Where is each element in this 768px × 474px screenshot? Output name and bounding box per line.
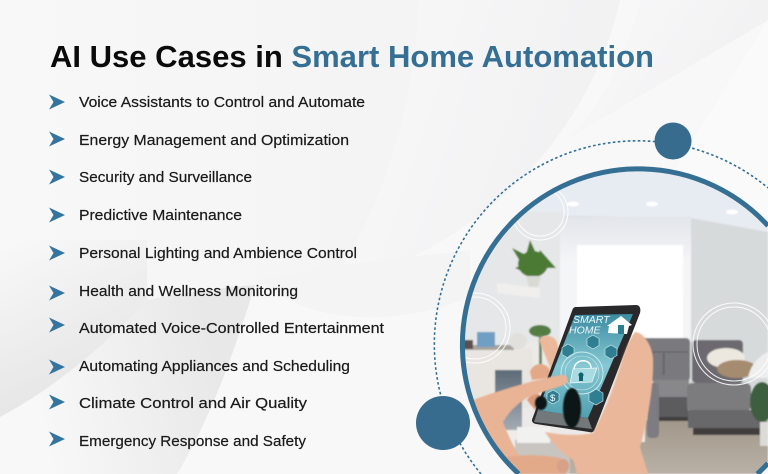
holding hand [545, 332, 653, 474]
fingers behind phone [527, 336, 560, 416]
mantel decor [462, 345, 514, 350]
item 7 [49, 318, 384, 337]
item 3: Security and Surveillance [79, 170, 252, 186]
item 4: Predictive Maintenance [79, 208, 242, 224]
walls and ceiling [564, 216, 768, 410]
fireplace [466, 352, 510, 400]
item 5: Personal Lighting and Ambience Control [79, 246, 357, 262]
item 2: Energy Management and Optimization [79, 133, 349, 149]
smartphone: $ [550, 393, 556, 404]
pointing hand [473, 375, 569, 474]
item 8: Automating Appliances and Scheduling [79, 359, 350, 375]
photo: smart home living room with phone [440, 168, 768, 474]
app icons [547, 335, 617, 405]
list of use cases [49, 94, 384, 450]
hologram circles [466, 190, 768, 386]
floor [569, 419, 768, 474]
room background [460, 168, 768, 474]
shelf and plant [498, 284, 539, 297]
small plant [529, 325, 551, 337]
photo ring border [462, 169, 768, 474]
item 10: Emergency Response and Safety [79, 434, 307, 450]
item 9: Climate Control and Air Quality [79, 396, 308, 412]
item 6: Health and Wellness Monitoring [79, 284, 298, 300]
screen text: SMART [573, 314, 611, 326]
dotted orbit ring [434, 141, 768, 474]
house icon [607, 316, 632, 334]
top accent circle [654, 122, 692, 160]
corner plant and pot [750, 382, 768, 422]
lock icon [561, 352, 603, 394]
smartphone: HOME [569, 324, 601, 336]
item 7: Automated Voice-Controlled Entertainment [79, 321, 384, 337]
ceiling lights [567, 202, 579, 206]
thumb reflections on screen [535, 388, 581, 428]
phone screen [538, 314, 633, 418]
title: AI Use Cases in Smart Home Automation [50, 39, 654, 74]
smartphone [532, 305, 640, 432]
bottom accent circle [416, 396, 470, 450]
item 1: Voice Assistants to Control and Automate [79, 95, 365, 111]
grey sofa [642, 338, 690, 381]
curtain and window [560, 217, 691, 342]
